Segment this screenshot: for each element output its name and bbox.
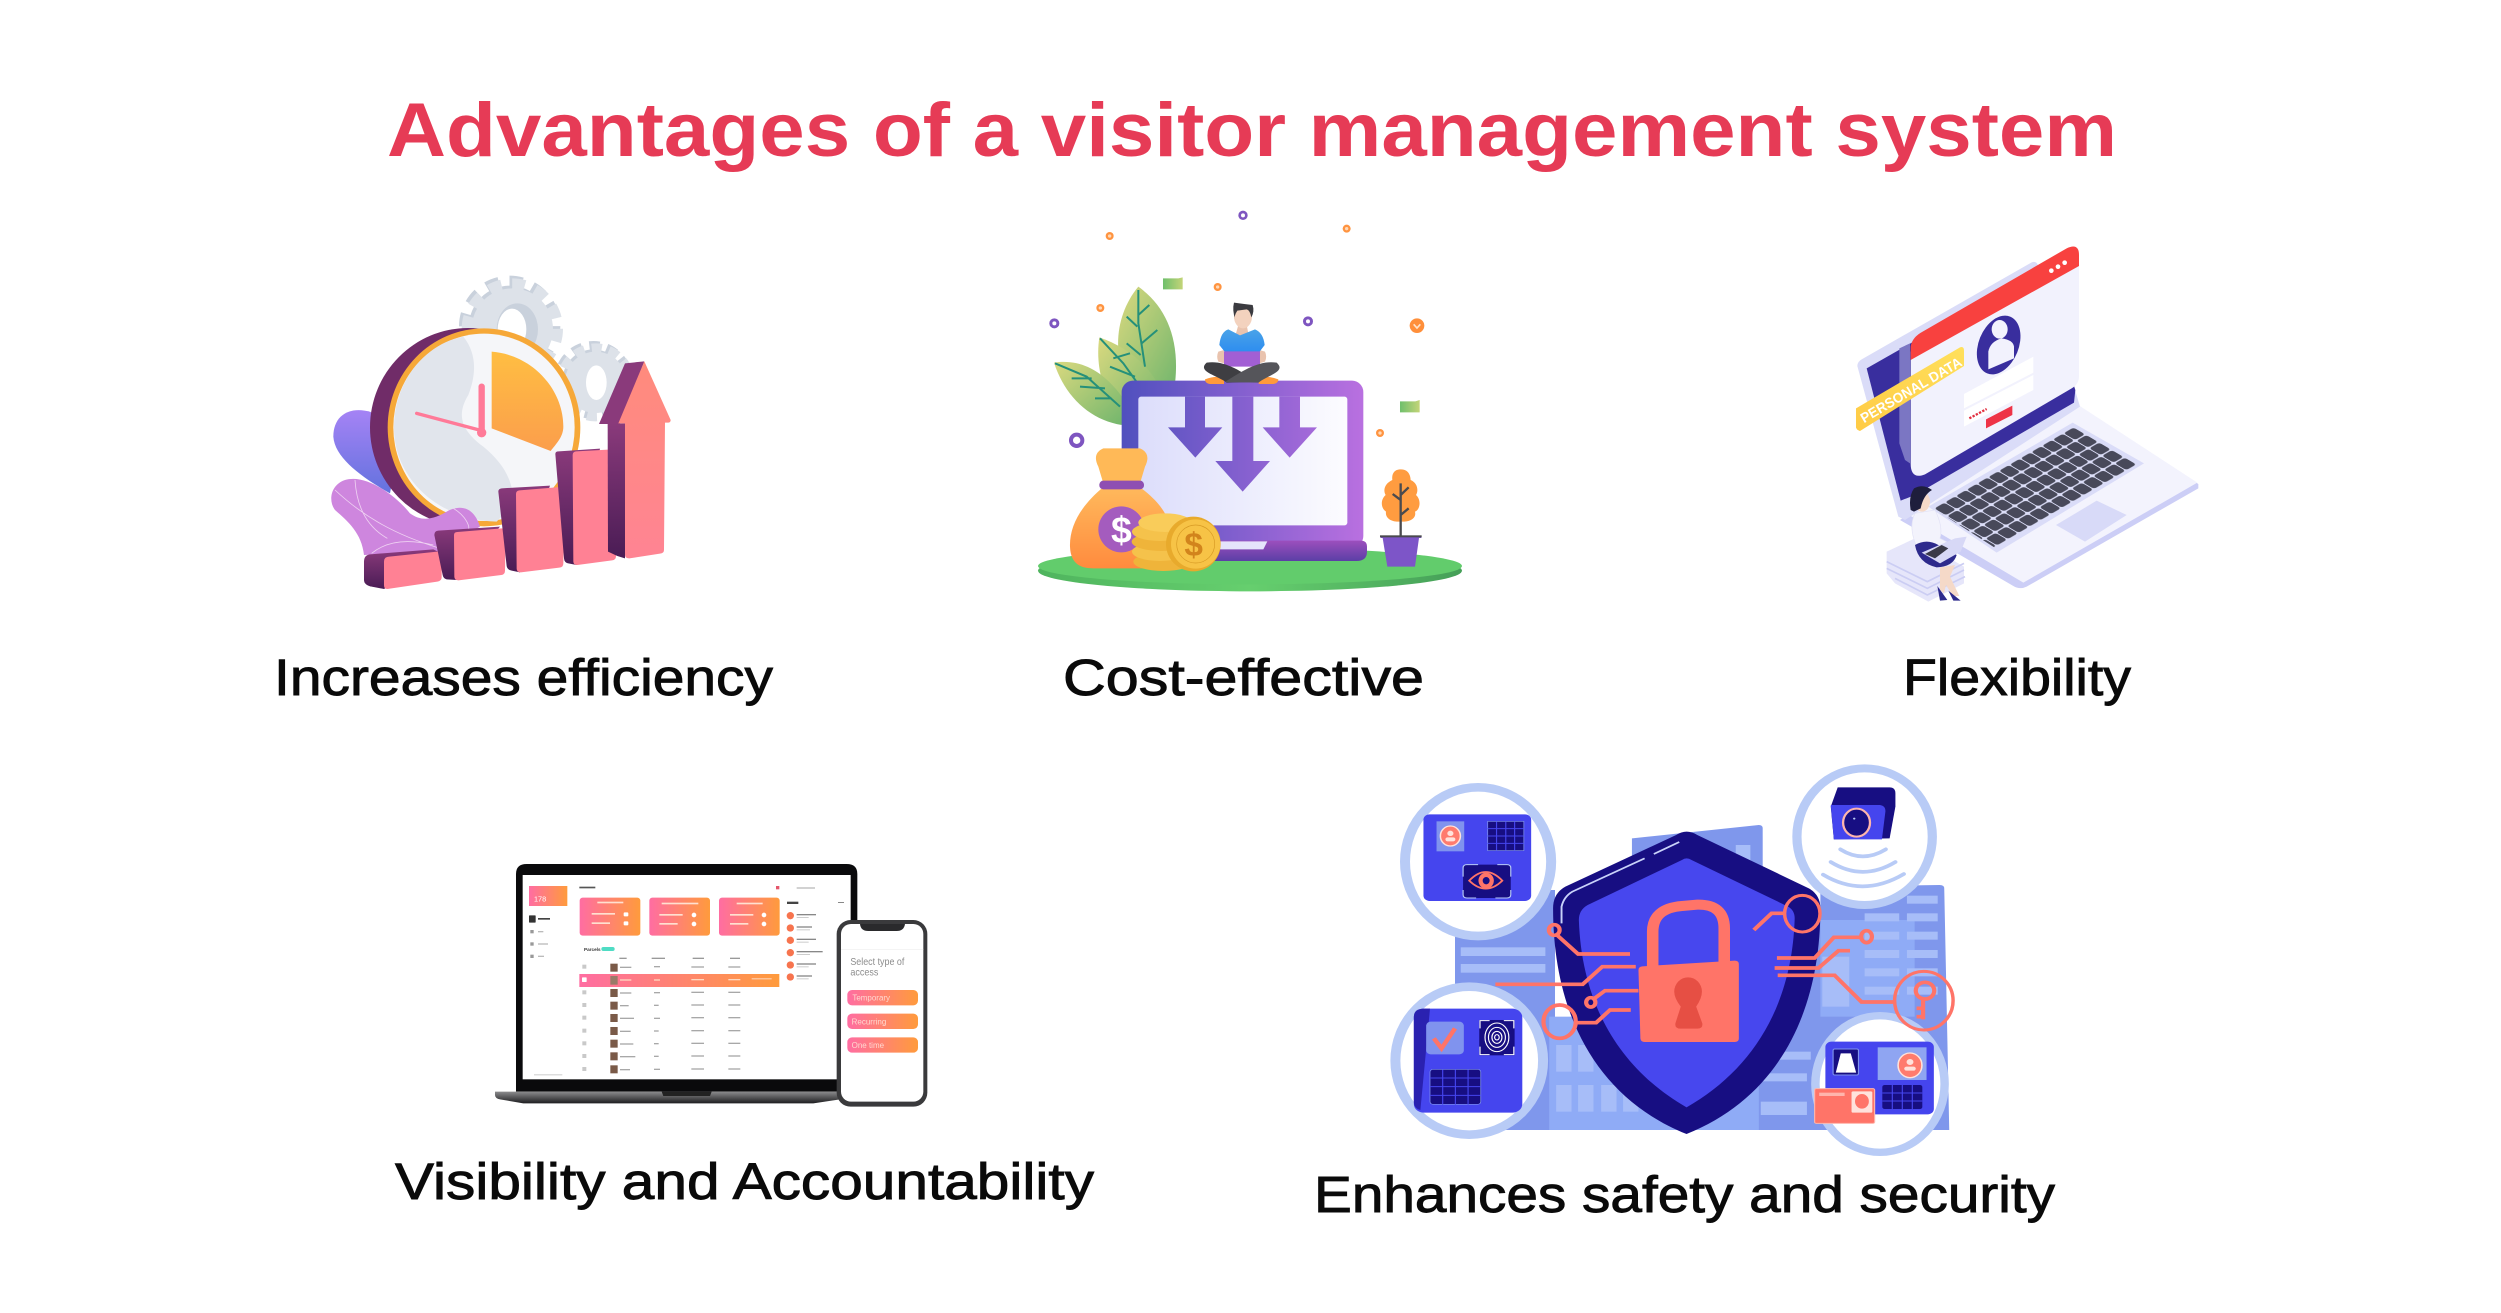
ground [1038,548,1462,591]
padlock [1638,905,1739,1042]
laptop lid [1857,262,2080,520]
dashboard cards [580,898,780,936]
phone buttons [847,990,918,1053]
icon: efficiency clock, gears and rising bars [331,282,671,589]
download arrows [1168,397,1317,492]
bar 4 [555,449,616,565]
dollar sign on coin: $ [1184,527,1203,564]
phone [837,920,927,1107]
sidebar [529,886,815,1075]
key in circle [1895,971,1953,1030]
phone buttons: One time [852,1041,885,1050]
visitor table: Parcels [584,947,601,952]
folders [1163,277,1420,412]
city buildings [1455,825,1949,1130]
seated woman [1910,486,1967,601]
coins [1132,513,1221,571]
personal data banner: PERSONAL DATA [1857,354,1965,426]
purple leaf [333,410,400,493]
money bag [1070,448,1167,568]
bar 1 [364,549,442,589]
large gear [465,282,557,374]
circle: ID card panel [1815,1016,1945,1152]
circle: security camera [1797,768,1932,905]
icon: security shield and padlock [1395,768,1953,1152]
icon: cost-effective laptop with money [1038,211,1462,591]
sidebar: 178 [534,895,546,904]
shield [1553,832,1820,1134]
small gear [559,346,630,416]
label: visibility and accountability: Visibility and Accountability [395,1153,1095,1210]
icon: flexibility laptop with login window [1856,247,2198,602]
seated person [1204,303,1280,384]
big laptop [1122,381,1367,561]
phone heading: Select type of [850,957,905,968]
phone buttons: Temporary [852,994,890,1003]
phone buttons: Recurring [852,1017,886,1026]
book stack [1887,538,1965,602]
circle: fingerprint panel [1395,987,1543,1135]
label: flexibility: Flexibility [1903,649,2132,706]
circuit lines [1495,895,1895,1038]
dollar sign on bag: $ [1111,509,1132,551]
phone: access [850,967,878,978]
title: Advantages of a visitor management system [387,88,2117,173]
leaves [1054,287,1176,425]
visitor table [579,947,779,1073]
bar 3 [498,486,564,572]
decorative dots [1049,211,1424,448]
rising arrow [599,361,671,558]
user avatar [1969,309,2029,381]
label: increases efficiency: Increases efficiency [274,649,774,706]
laptop [495,864,857,1103]
laptop base [1900,405,2198,588]
icon: dashboard on laptop and phone [495,864,927,1107]
potted plant [1380,469,1422,567]
clock [370,328,580,527]
login window [1911,247,2079,476]
label: cost-effective: Cost-effective [1063,649,1424,706]
bar 2 [434,527,506,580]
alerts list [787,902,844,981]
pink leaf [331,479,480,555]
circle: access panel with eye scan [1405,787,1551,936]
label: enhances safety and security: Enhances safety and security [1314,1166,2056,1223]
